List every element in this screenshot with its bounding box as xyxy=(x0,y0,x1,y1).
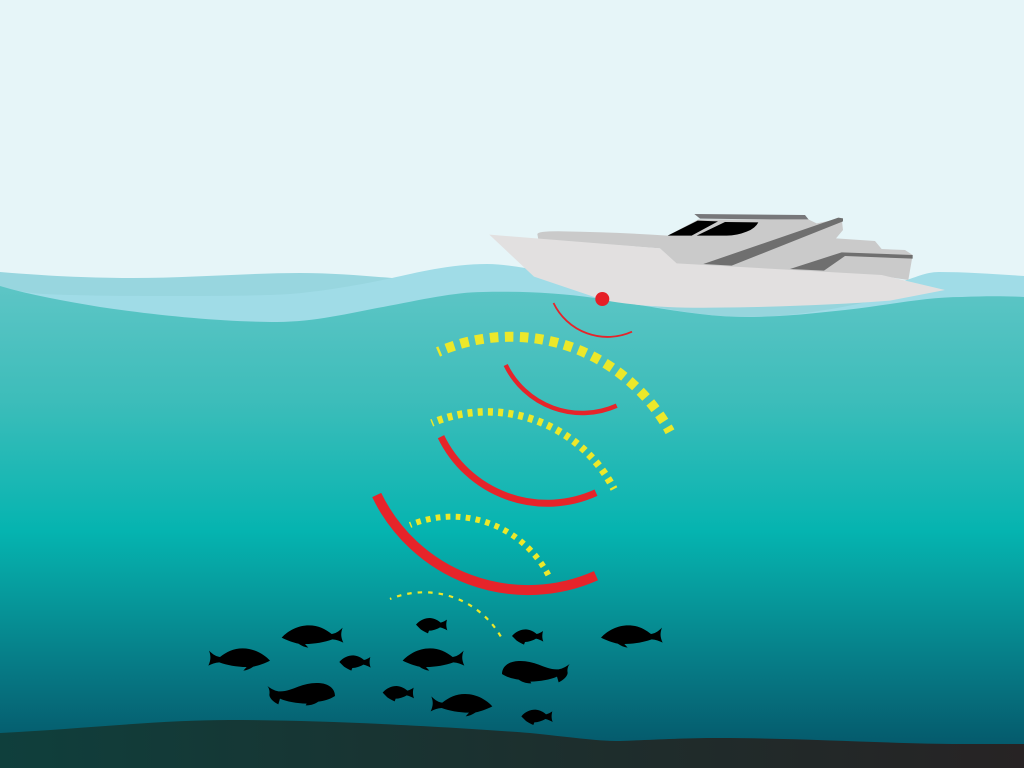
yellow echo 4 xyxy=(390,592,503,640)
boat hull xyxy=(489,235,945,308)
round fish 2 xyxy=(502,661,570,683)
outgoing red sonar pulses xyxy=(377,303,632,590)
fish 5 xyxy=(431,694,492,716)
fish 1 xyxy=(208,648,270,671)
small fish 1 xyxy=(339,655,371,671)
yellow echo 3 xyxy=(410,517,548,575)
small fish 4 xyxy=(512,629,543,645)
sonar emitter dot xyxy=(595,292,609,306)
boat cabin xyxy=(537,218,913,280)
boat roof xyxy=(694,214,809,220)
red pulse 2 xyxy=(506,365,617,413)
red pulse 4 xyxy=(377,495,596,590)
boat windows xyxy=(668,221,758,236)
small fish 5 xyxy=(521,710,553,725)
yellow echo 1 xyxy=(438,337,670,432)
yellow echo 2 xyxy=(432,412,614,489)
red pulse 1 xyxy=(554,303,632,337)
boat xyxy=(489,214,945,308)
red pulse 3 xyxy=(441,437,596,503)
sea xyxy=(0,286,1024,768)
school of fish xyxy=(208,618,663,725)
small fish 2 xyxy=(416,618,447,633)
small fish 3 xyxy=(383,686,414,701)
sky xyxy=(0,0,1024,320)
fish 2 xyxy=(282,625,343,648)
round fish 1 xyxy=(267,683,335,705)
seabed xyxy=(0,720,1024,768)
fish 3 xyxy=(403,648,464,671)
fish 4 xyxy=(601,625,663,648)
back wave xyxy=(0,272,392,300)
light wave xyxy=(0,264,1024,330)
returning yellow echoes xyxy=(390,337,670,640)
boat hull stripes xyxy=(703,218,913,271)
darker wave patch under hull xyxy=(600,296,880,317)
